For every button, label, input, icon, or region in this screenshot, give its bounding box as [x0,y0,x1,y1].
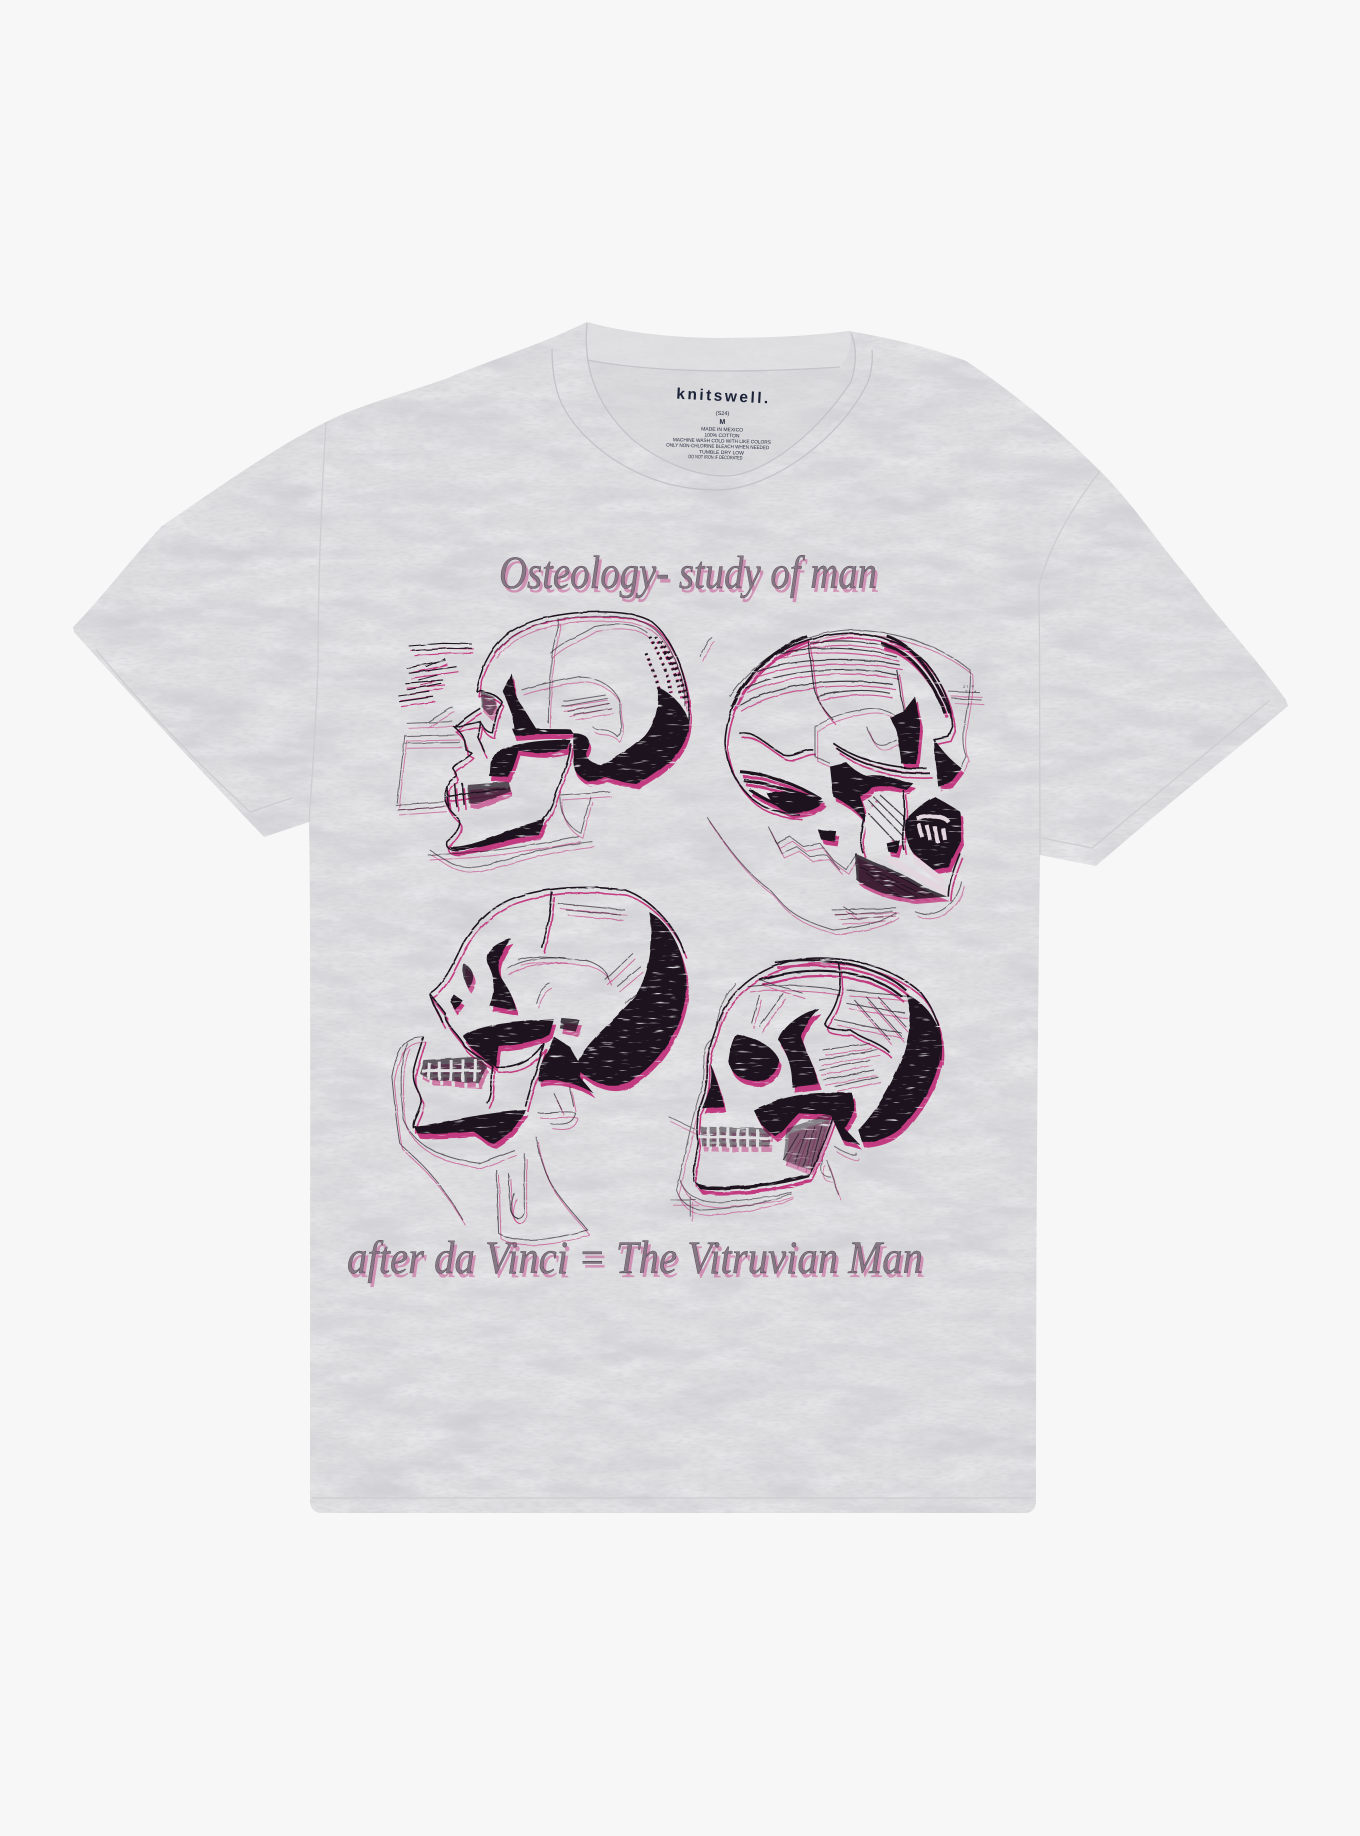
skull: top right facing right with ghost outline: 2 1 . 4 [963,684,975,689]
title: Osteology - study of man: Osteology- study of man [499,547,877,599]
t-shirt body [73,322,1288,1513]
care text: MADE IN MEXICO [701,426,743,434]
collar [552,324,872,490]
care text: M [719,419,725,426]
skull: bottom left profile with neck [392,887,689,1245]
skull: bottom right three-quarter view [669,958,944,1222]
care text: MACHINE WASH COLD WITH LIKE COLORS [673,437,772,446]
neck label [666,386,772,462]
skull: top right facing right with ghost outline [700,630,984,935]
measurement notes [398,643,472,702]
hatching on crown [738,641,933,897]
care text: ONLY NON-CHLORINE BLEACH WHEN NEEDED [666,443,770,451]
care text: 100% COTTON [704,433,740,439]
skull artwork [392,612,984,1245]
teeth and jaw highlights [887,816,948,892]
care text: TUMBLE DRY LOW [699,449,744,457]
care text [666,410,772,462]
brand name: knitswell. [676,386,769,407]
care text: DO NOT IRON IF DECORATED [688,454,743,462]
care text: (S24) [716,411,730,417]
skull: top left profile with measurement notes [395,612,691,872]
caption: after da Vinci = The Vitruvian Man: after da Vinci = The Vitruvian Man [347,1232,923,1284]
